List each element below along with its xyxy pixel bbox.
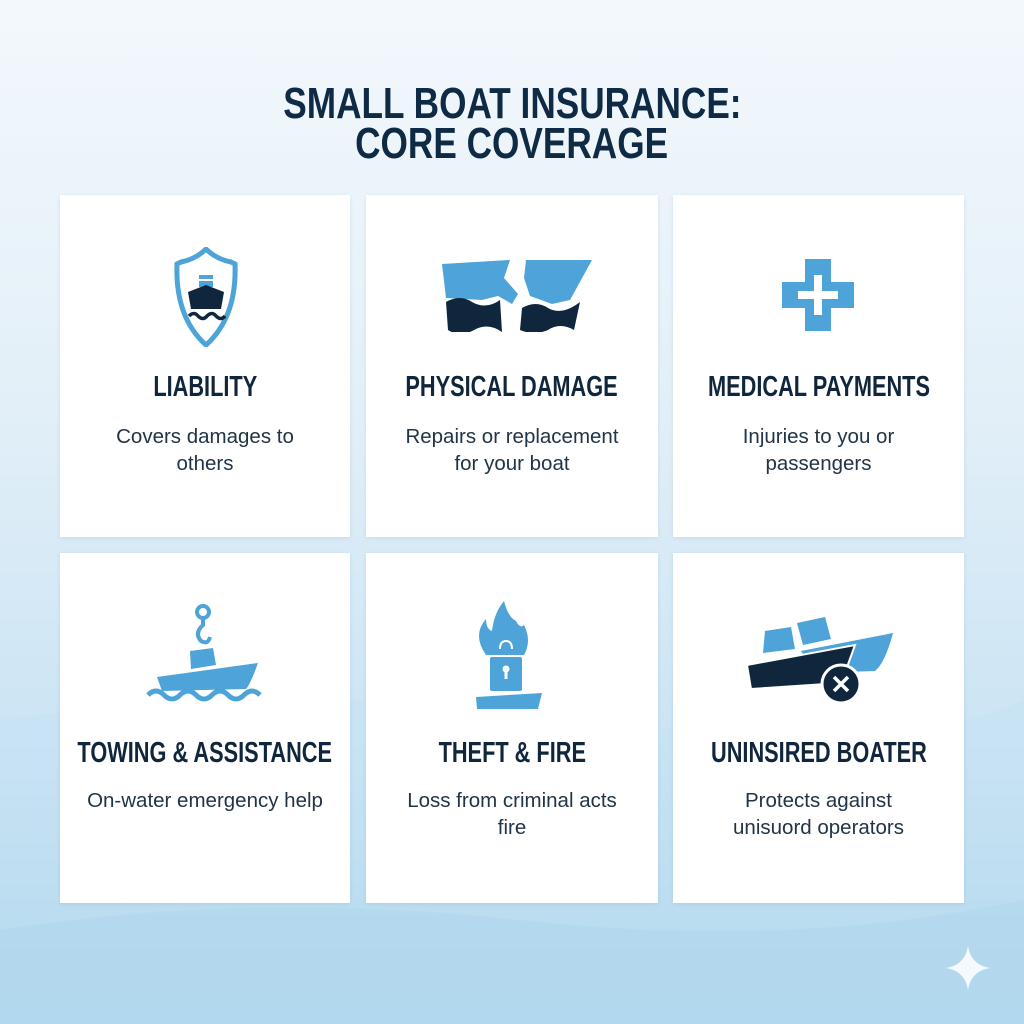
description: Protects against <box>745 789 892 812</box>
title <box>283 79 741 168</box>
description: fire <box>498 816 526 839</box>
description <box>733 789 904 839</box>
panel: theft and fire <box>366 553 658 903</box>
heading: THEFT & FIRE <box>438 737 586 769</box>
icon: flame lock <box>476 601 542 709</box>
panel: towing <box>60 553 350 903</box>
heading: UNINSIRED BOATER <box>711 737 926 769</box>
icon: boats with x <box>748 617 893 702</box>
description: On-water emergency help <box>87 789 323 812</box>
icon: broken hull <box>442 260 592 332</box>
panel: physical damage <box>366 195 658 537</box>
title: SMALL BOAT INSURANCE: <box>283 79 741 128</box>
description: Loss from criminal acts <box>407 789 617 812</box>
heading: LIABILITY <box>153 371 257 403</box>
icon: shield with ship <box>174 247 238 347</box>
description <box>116 425 294 475</box>
title: CORE COVERAGE <box>356 119 668 168</box>
description <box>407 789 617 839</box>
heading: PHYSICAL DAMAGE <box>406 371 618 403</box>
description: others <box>176 452 233 475</box>
description <box>743 425 894 475</box>
description: passengers <box>766 452 871 475</box>
heading: TOWING & ASSISTANCE <box>78 737 332 769</box>
icon: sparkle <box>946 946 990 990</box>
description: for your boat <box>454 452 570 475</box>
heading: MEDICAL PAYMENTS <box>708 371 929 403</box>
description: unisuord operators <box>733 816 904 839</box>
icon: hook and boat <box>146 604 262 702</box>
description: Injuries to you or <box>743 425 894 448</box>
icon: medical cross <box>782 259 854 331</box>
panel: uninsured boater <box>673 553 964 903</box>
description: Repairs or replacement <box>405 425 619 448</box>
description <box>405 425 619 475</box>
panel: medical payments <box>673 195 964 537</box>
description: Covers damages to <box>116 425 294 448</box>
panel: liability <box>60 195 350 537</box>
